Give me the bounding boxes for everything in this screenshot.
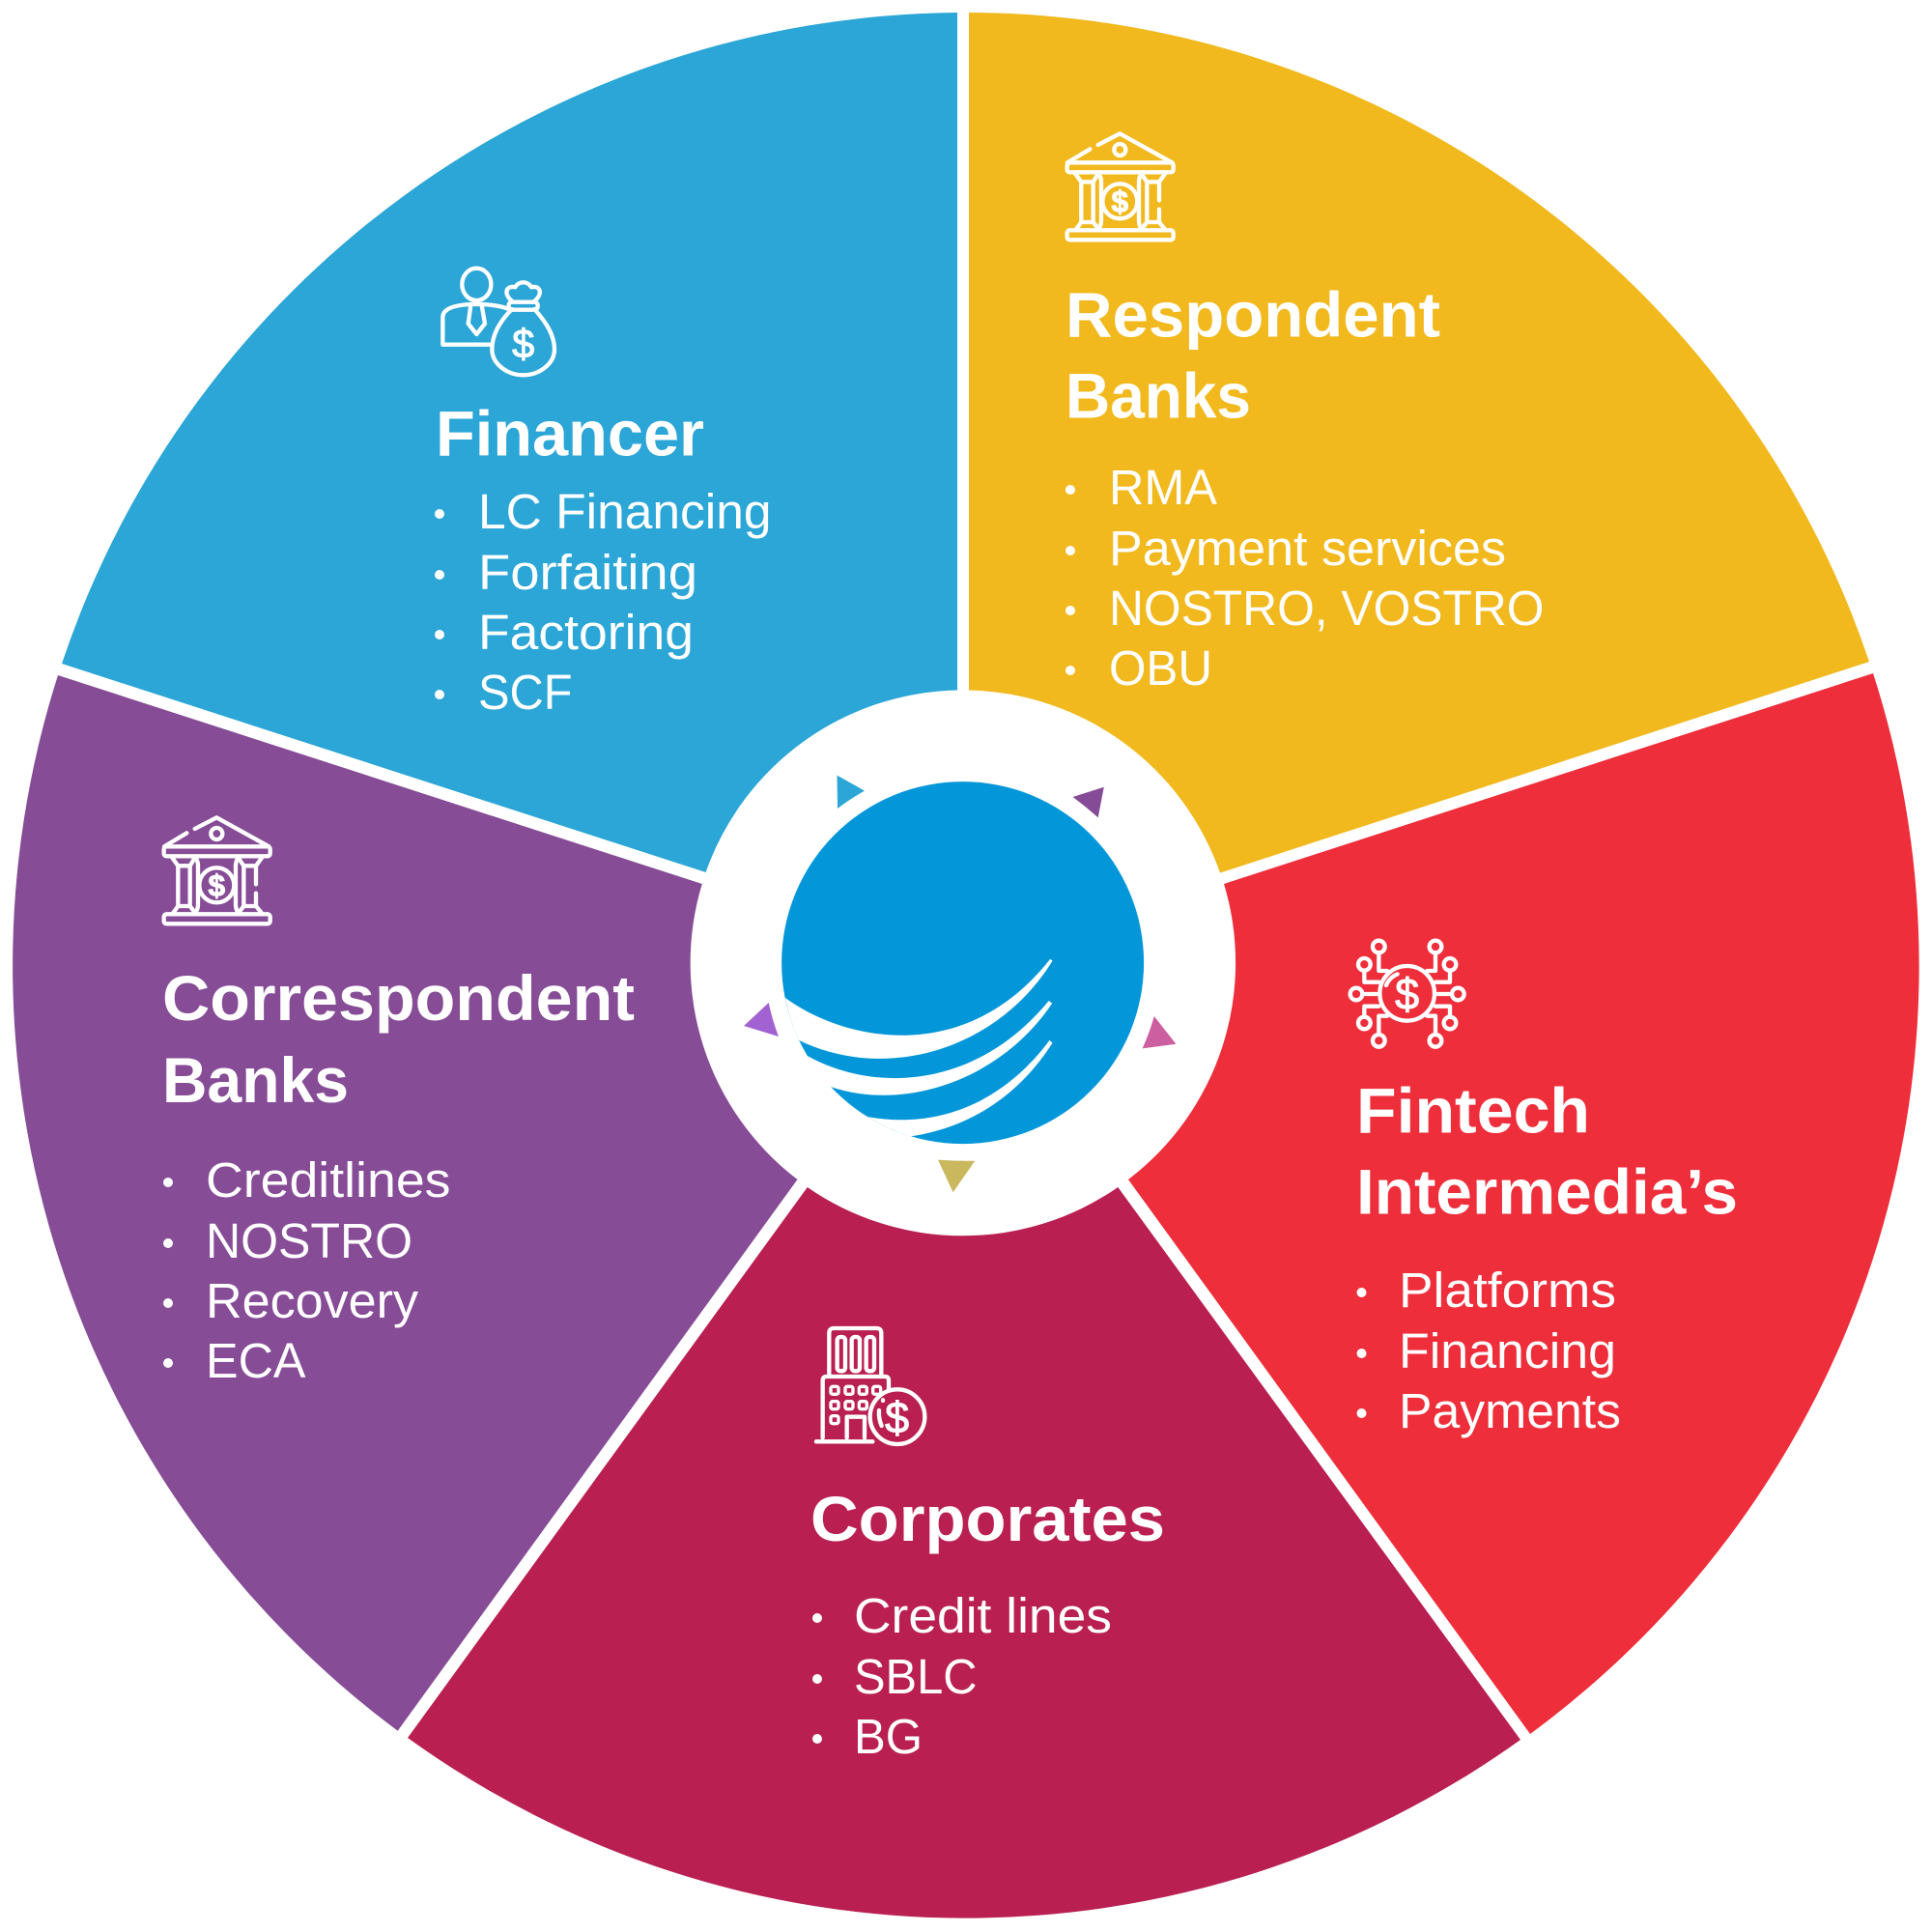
list: corporates: SBLC — [854, 1649, 978, 1704]
triangle: gold — [938, 1160, 975, 1192]
icon: office building with coin — [816, 1328, 924, 1444]
heading: respondent banks: Respondent — [1065, 278, 1440, 350]
panel: financer — [62, 13, 957, 872]
sector: correspondent banks — [13, 675, 798, 1731]
list: correspondent banks: NOSTRO — [206, 1213, 412, 1268]
heading: correspondent banks: Correspondent — [162, 962, 635, 1034]
list: financer: SCF — [478, 665, 572, 720]
triangle: violet — [744, 1003, 779, 1037]
triangle: blue — [837, 776, 865, 809]
heading: fintech intermediaries: Fintech — [1356, 1074, 1590, 1146]
sector: fintech intermediaries — [1128, 673, 1919, 1734]
icon: bank — [1067, 133, 1174, 240]
list: fintech intermediaries: Payments — [1399, 1383, 1621, 1438]
list: respondent banks: OBU — [1109, 640, 1212, 696]
triangle: pink — [1143, 1016, 1176, 1048]
sector: respondent banks — [969, 13, 1869, 873]
triangle: purple — [1073, 787, 1104, 817]
list: fintech intermediaries: Platforms — [1399, 1263, 1616, 1318]
list: correspondent banks: Recovery — [206, 1273, 419, 1328]
panel: correspondent banks: Banks — [162, 1044, 349, 1116]
list: respondent banks: Payment services — [1109, 521, 1506, 576]
sector: corporates — [408, 1187, 1520, 1918]
center logo — [744, 776, 1176, 1192]
icon: fintech network: $ — [1395, 970, 1419, 1019]
icon: fintech network — [1350, 941, 1464, 1047]
list: correspondent banks — [163, 1152, 450, 1388]
list: financer: Factoring — [478, 605, 694, 660]
list: corporates — [812, 1588, 1112, 1764]
heading: financer: Financer — [436, 398, 704, 469]
list: financer: LC Financing — [478, 484, 771, 539]
icon: person with money bag — [442, 269, 554, 375]
list: respondent banks — [1065, 460, 1544, 696]
list: financer: Forfaiting — [478, 545, 697, 600]
icon: person with money bag: $ — [512, 321, 534, 366]
logo globe — [781, 781, 1144, 1144]
logo swooshes — [785, 959, 1053, 1136]
list: fintech intermediaries — [1356, 1263, 1621, 1438]
list: correspondent banks: ECA — [206, 1333, 305, 1388]
list: fintech intermediaries: Financing — [1399, 1323, 1616, 1378]
list: respondent banks: RMA — [1109, 460, 1217, 515]
panel: corporates — [408, 1187, 1520, 1918]
sector: financer — [62, 13, 957, 872]
heading: corporates: Corporates — [810, 1483, 1165, 1554]
icon: bank — [164, 817, 270, 923]
panel: respondent banks: Banks — [1065, 359, 1251, 431]
panel: respondent banks — [969, 13, 1869, 873]
list: respondent banks: NOSTRO, VOSTRO — [1109, 581, 1544, 636]
icon: office building with coin: $ — [885, 1393, 909, 1442]
panel: fintech intermediaries — [1128, 673, 1919, 1734]
list: financer — [435, 484, 771, 720]
list: corporates: BG — [854, 1709, 923, 1764]
list: correspondent banks: Creditlines — [206, 1152, 450, 1208]
list: corporates: Credit lines — [854, 1588, 1112, 1643]
panel: correspondent banks — [13, 675, 798, 1731]
panel: fintech intermediaries: Intermedia’s — [1356, 1155, 1738, 1227]
